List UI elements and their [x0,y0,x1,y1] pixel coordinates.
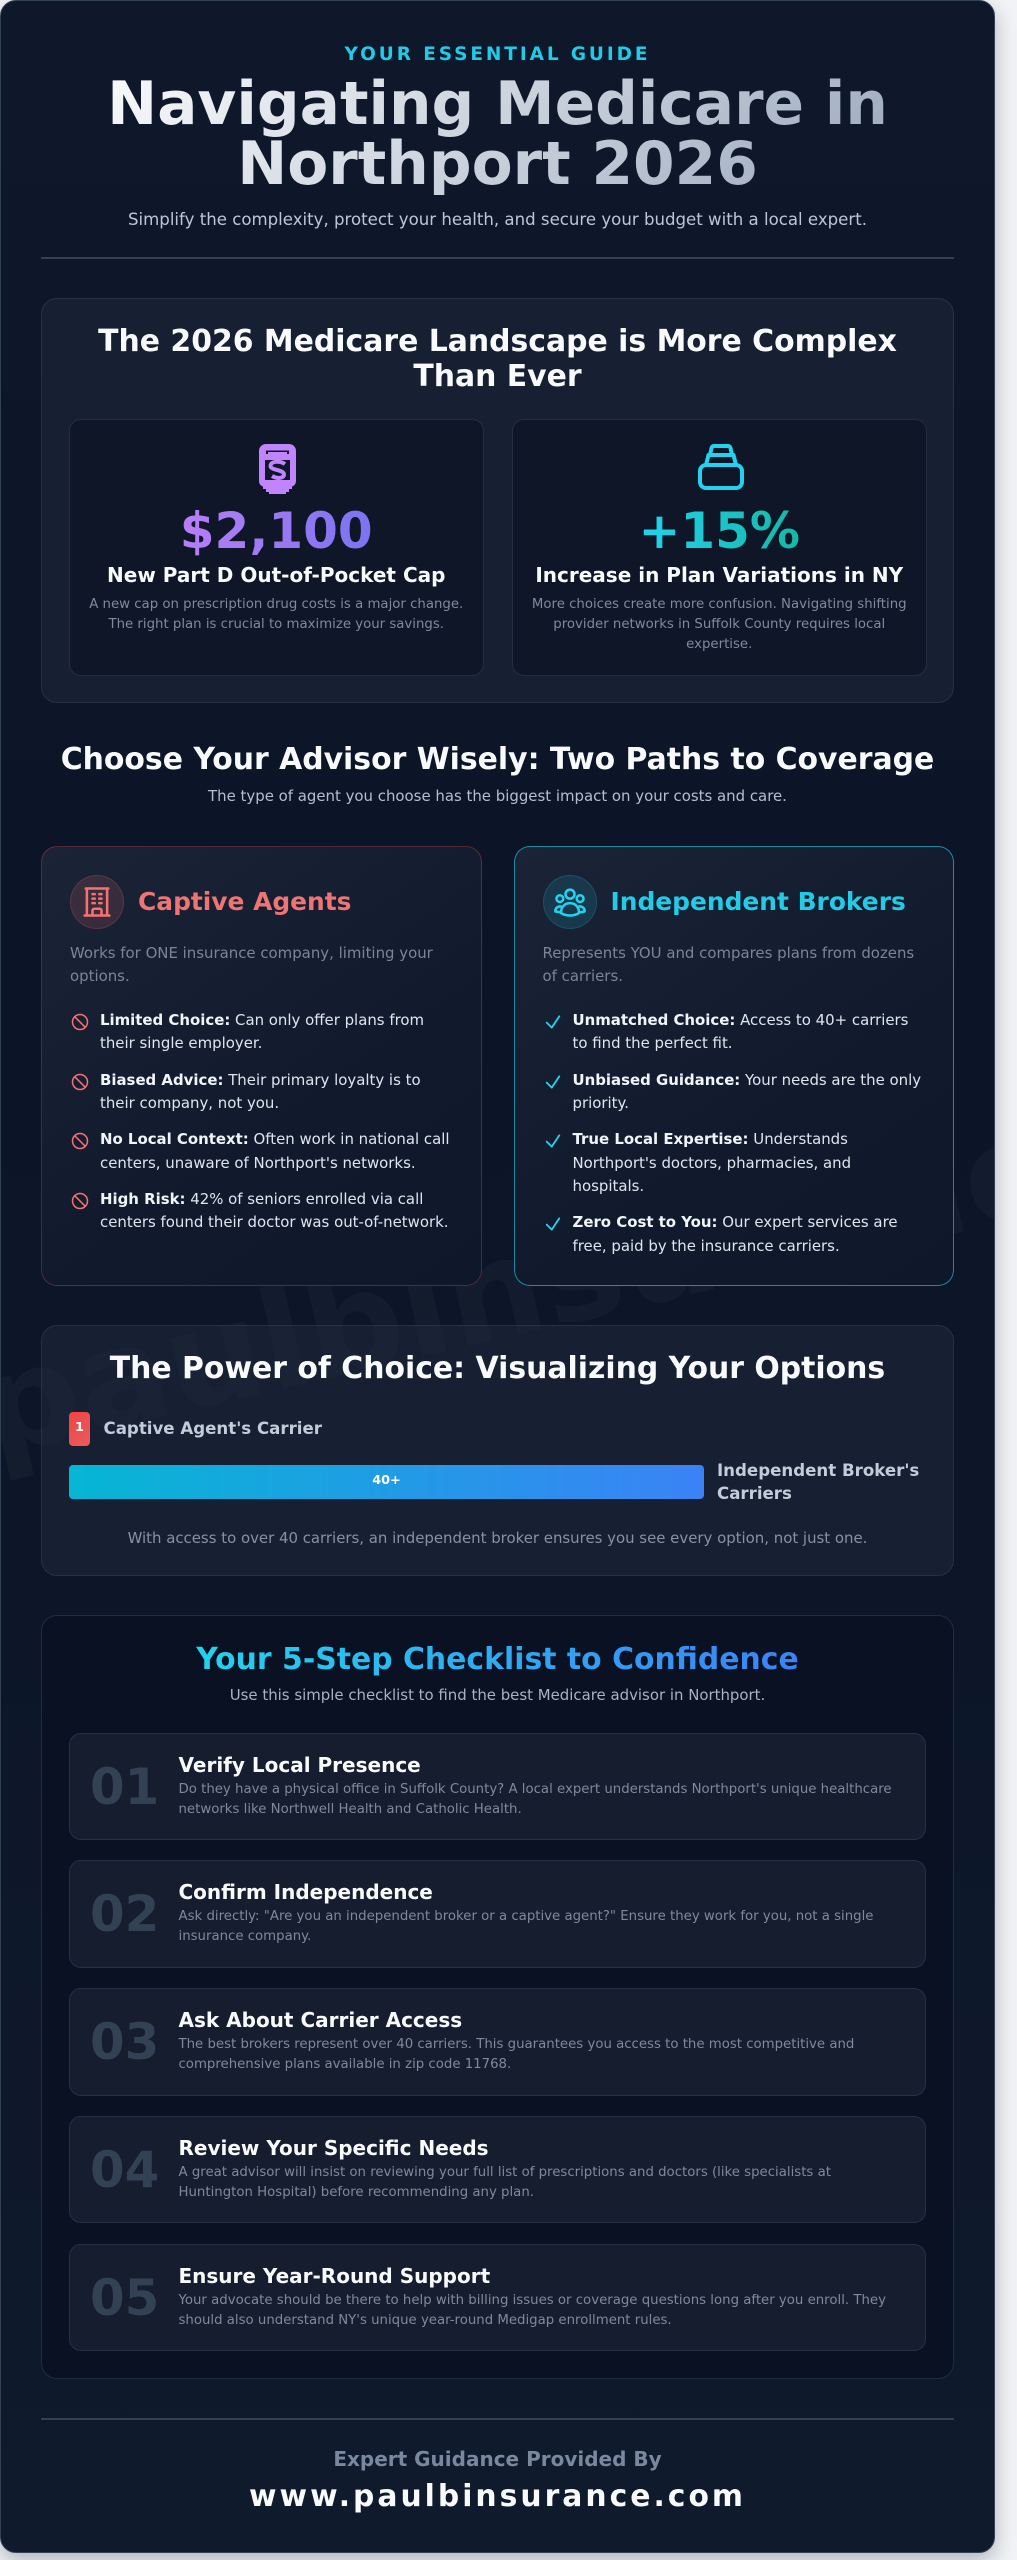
list item: local expertise: True Local Expertise: Understands [572,1130,848,1148]
stat value: $2,100 [180,502,373,560]
bar label: broker: Carriers [717,1484,792,1503]
step 4 [69,2116,926,2223]
list item: high risk: High Risk: 42% of seniors enrolled via call [100,1190,423,1208]
step description: A great advisor will insist on reviewing your full list of prescriptions and doctors (like specialists at [178,2165,831,2180]
step description: insurance company. [178,1929,311,1944]
list item: limited choice: Limited Choice: Can only offer plans from [100,1011,424,1029]
stat label: Increase in Plan Variations in NY [535,563,903,587]
stat description: provider networks in Suffolk County requires local [553,617,885,632]
step title: Verify Local Presence [178,1752,421,1776]
step 2 [69,1860,926,1968]
panel: 5-step checklist [41,1615,954,2379]
step title: Confirm Independence [178,1880,433,1904]
step title: Review Your Specific Needs [178,2136,489,2160]
section heading: two paths: Choose Your Advisor Wisely: Two Paths to Coverage [61,742,934,777]
list item: limited choice: their single employer. [100,1034,262,1052]
step title: Ask About Carrier Access [178,2008,462,2032]
list item: unmatched choice: Unmatched Choice: Access to 40+ carriers [572,1011,908,1029]
panel subheading: Use this simple checklist to find the best Medicare advisor in Northport. [230,1686,765,1704]
step description: Do they have a physical office in Suffolk County? A local expert understands Northport's unique healthcare [178,1782,892,1796]
icon: prescription bottle with dollar sign [259,444,296,494]
bar label: captive: Captive Agent's Carrier [104,1419,322,1438]
description: Represents YOU and compares plans from dozens [542,944,914,962]
bar: captive agent carrier [69,1412,90,1446]
list item: unmatched choice: to find the perfect fit. [572,1034,733,1052]
step description [178,2292,886,2328]
stat label: New Part D Out-of-Pocket Cap [107,563,445,587]
footer label: Expert Guidance Provided By [333,2447,662,2471]
bar label: broker [717,1461,919,1503]
stat description: The right plan is crucial to maximize your savings. [108,617,444,632]
step description: networks like Northwell Health and Catholic Health. [178,1802,522,1816]
step number: 03 [90,2013,159,2071]
list item: biased advice: their company, not you. [100,1094,279,1112]
stat description [89,597,463,632]
panel heading: Than Ever [413,358,582,394]
panel heading: The Power of Choice: Visualizing Your Options [110,1351,885,1386]
description [70,944,433,985]
caption: With access to over 40 carriers, an independent broker ensures you see every option, not just one. [128,1529,867,1547]
description: of carriers. [542,967,623,985]
step description: Ask directly: "Are you an independent broker or a captive agent?" Ensure they work for you, not a single [178,1909,873,1924]
list item: unmatched choice [546,1011,908,1052]
step description [178,2165,831,2200]
step title: Ensure Year-Round Support [178,2264,490,2288]
footer website: www.paulbinsurance.com [249,2479,746,2514]
bar: independent broker carriers [69,1465,704,1499]
icon: stacked layers [698,444,744,490]
step description: comprehensive plans available in zip code 11768. [178,2057,511,2072]
panel heading [98,324,897,394]
stat description [532,597,907,652]
subtitle: Simplify the complexity, protect your health, and secure your budget with a local expert. [128,210,867,229]
step 5 [69,2244,926,2351]
section subheading: The type of agent you choose has the biggest impact on your costs and care. [208,787,787,805]
list item: zero cost [546,1213,898,1255]
list item: unbiased guidance: Unbiased Guidance: Your needs are the only [572,1071,921,1089]
step number: 02 [90,1885,159,1943]
icon: building [70,875,124,929]
panel: independent brokers [514,846,954,1286]
panel: captive agents [41,846,482,1286]
panel heading: Your 5-Step Checklist to Confidence [196,1642,799,1677]
panel heading: The 2026 Medicare Landscape is More Complex [98,324,897,359]
description [542,944,914,985]
bar: independent broker carriers: 40+ [372,1473,401,1488]
stat value: +15% [638,502,800,560]
panel: 2026 landscape [41,298,954,703]
step number: 04 [90,2141,159,2199]
bar label: broker: Independent Broker's [717,1461,919,1480]
list item: biased advice: Biased Advice: Their primary loyalty is to [100,1071,421,1089]
step description: should also understand NY's unique year-round Medigap enrollment rules. [178,2312,672,2328]
step description [178,1909,873,1944]
description: options. [70,967,130,985]
main title: Navigating Medicare in [107,70,888,139]
step 3 [69,1988,926,2096]
list item: no local context: centers, unaware of Northport's networks. [100,1154,416,1172]
heading: Captive Agents [138,887,351,916]
main title: Northport 2026 [237,130,758,199]
stat description: expertise. [686,637,752,652]
description: Works for ONE insurance company, limiting your [70,944,433,962]
step description: Huntington Hospital) before recommending any plan. [178,2185,534,2200]
list item: zero cost: Zero Cost to You: Our expert services are [572,1213,898,1231]
step description: The best brokers represent over 40 carriers. This guarantees you access to the most competitive and [178,2037,854,2052]
stat card: plan variations [512,419,926,676]
step description [178,2037,854,2072]
list item: high risk: centers found their doctor was out-of-network. [100,1213,448,1231]
stat description: More choices create more confusion. Navigating shifting [532,597,907,612]
eyebrow label: YOUR ESSENTIAL GUIDE [345,44,650,65]
list item: limited choice [72,1011,424,1052]
list item: local expertise [546,1130,851,1195]
list item: unbiased guidance [546,1071,921,1112]
list item: high risk [72,1190,448,1231]
step number: 05 [90,2268,159,2326]
list item: no local context: No Local Context: Often work in national call [100,1130,450,1148]
heading: Independent Brokers [610,887,906,916]
bar: captive agent carrier: 1 [75,1420,84,1435]
list item: zero cost: free, paid by the insurance carriers. [572,1237,840,1255]
step 1 [69,1732,926,1840]
list item: biased advice [72,1071,421,1112]
stat description: A new cap on prescription drug costs is a major change. [89,597,463,612]
list item: local expertise: hospitals. [572,1177,644,1195]
list item: unbiased guidance: priority. [572,1094,629,1112]
step description [178,1782,892,1816]
step description: Your advocate should be there to help with billing issues or coverage questions long after you enroll. They [178,2292,886,2308]
stat card: Part D cap [69,419,484,676]
panel: power of choice [41,1325,954,1576]
main title [41,75,954,195]
step number: 01 [90,1758,159,1816]
list item: no local context [72,1130,450,1172]
list item: local expertise: Northport's doctors, pharmacies, and [572,1154,851,1172]
icon: group of people [542,875,596,929]
